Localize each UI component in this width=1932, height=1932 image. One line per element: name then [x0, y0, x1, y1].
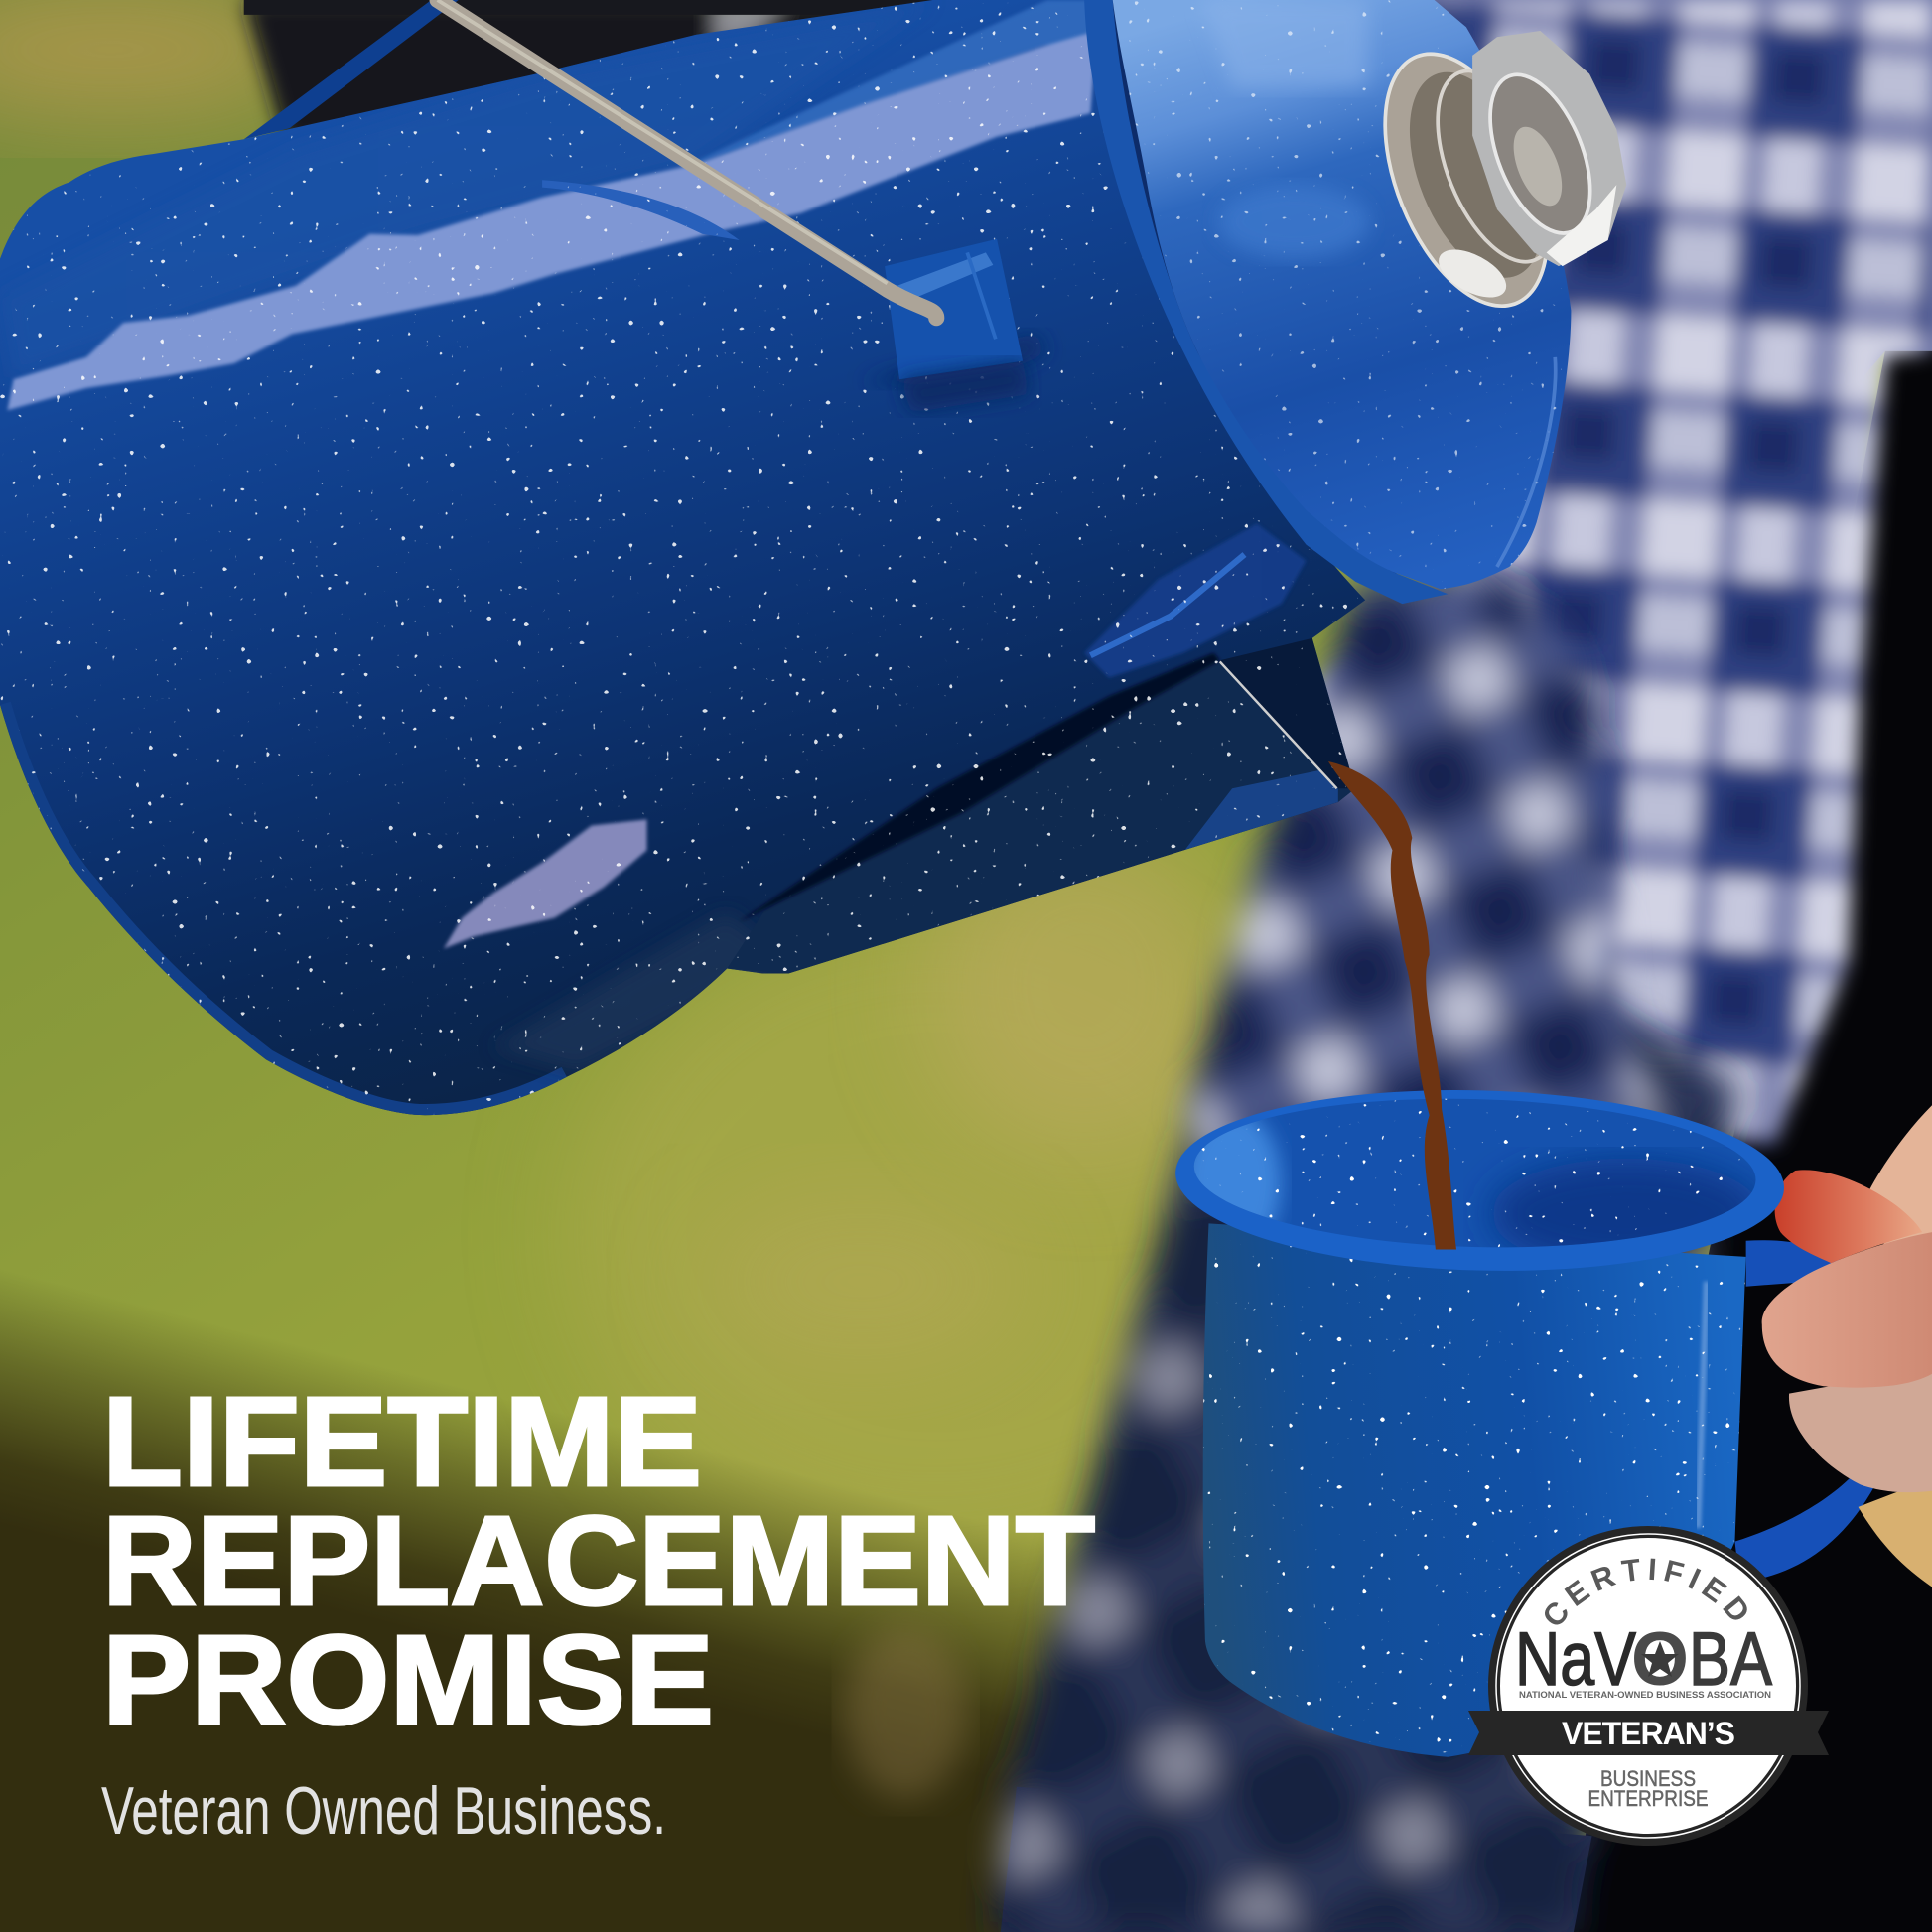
plaid shirt	[992, 0, 1932, 1932]
ribbon: VETERAN’S	[1562, 1716, 1735, 1751]
bail handle	[438, 0, 1029, 413]
glass knob	[1352, 31, 1626, 330]
heading: REPLACEMENT	[102, 1490, 1095, 1632]
coffee stream	[1328, 761, 1456, 1249]
hand	[1762, 1105, 1932, 1587]
kettle lid	[1109, 0, 1601, 604]
heading: LIFETIME	[102, 1371, 702, 1513]
mug handle	[1734, 1240, 1875, 1578]
business enterprise text: ENTERPRISE	[1588, 1786, 1708, 1811]
NaVOBA wordmark: BA	[1689, 1617, 1772, 1702]
business enterprise text	[1588, 1766, 1708, 1811]
subheading: Veteran Owned Business.	[101, 1773, 666, 1849]
heading	[102, 1371, 1095, 1751]
kettle handle strap	[244, 0, 459, 139]
heading: PROMISE	[102, 1609, 714, 1751]
NaVOBA certification badge	[1468, 1526, 1829, 1846]
business enterprise text: BUSINESS	[1600, 1766, 1696, 1791]
lid seam shadow	[1113, 0, 1392, 579]
kettle body	[0, 0, 1365, 1115]
NaVOBA wordmark	[1515, 1617, 1772, 1702]
kettle lid band	[1084, 0, 1448, 604]
certified arc text: CERTIFIED	[1545, 1559, 1747, 1624]
kettle speckles	[0, 0, 1380, 1121]
ribbon	[1468, 1711, 1829, 1755]
NaVOBA wordmark: NaV	[1515, 1617, 1636, 1702]
mug	[1173, 1082, 1786, 1774]
association line: NATIONAL VETERAN-OWNED BUSINESS ASSOCIATION	[1519, 1690, 1771, 1701]
NaVOBA wordmark: O	[1631, 1617, 1689, 1702]
